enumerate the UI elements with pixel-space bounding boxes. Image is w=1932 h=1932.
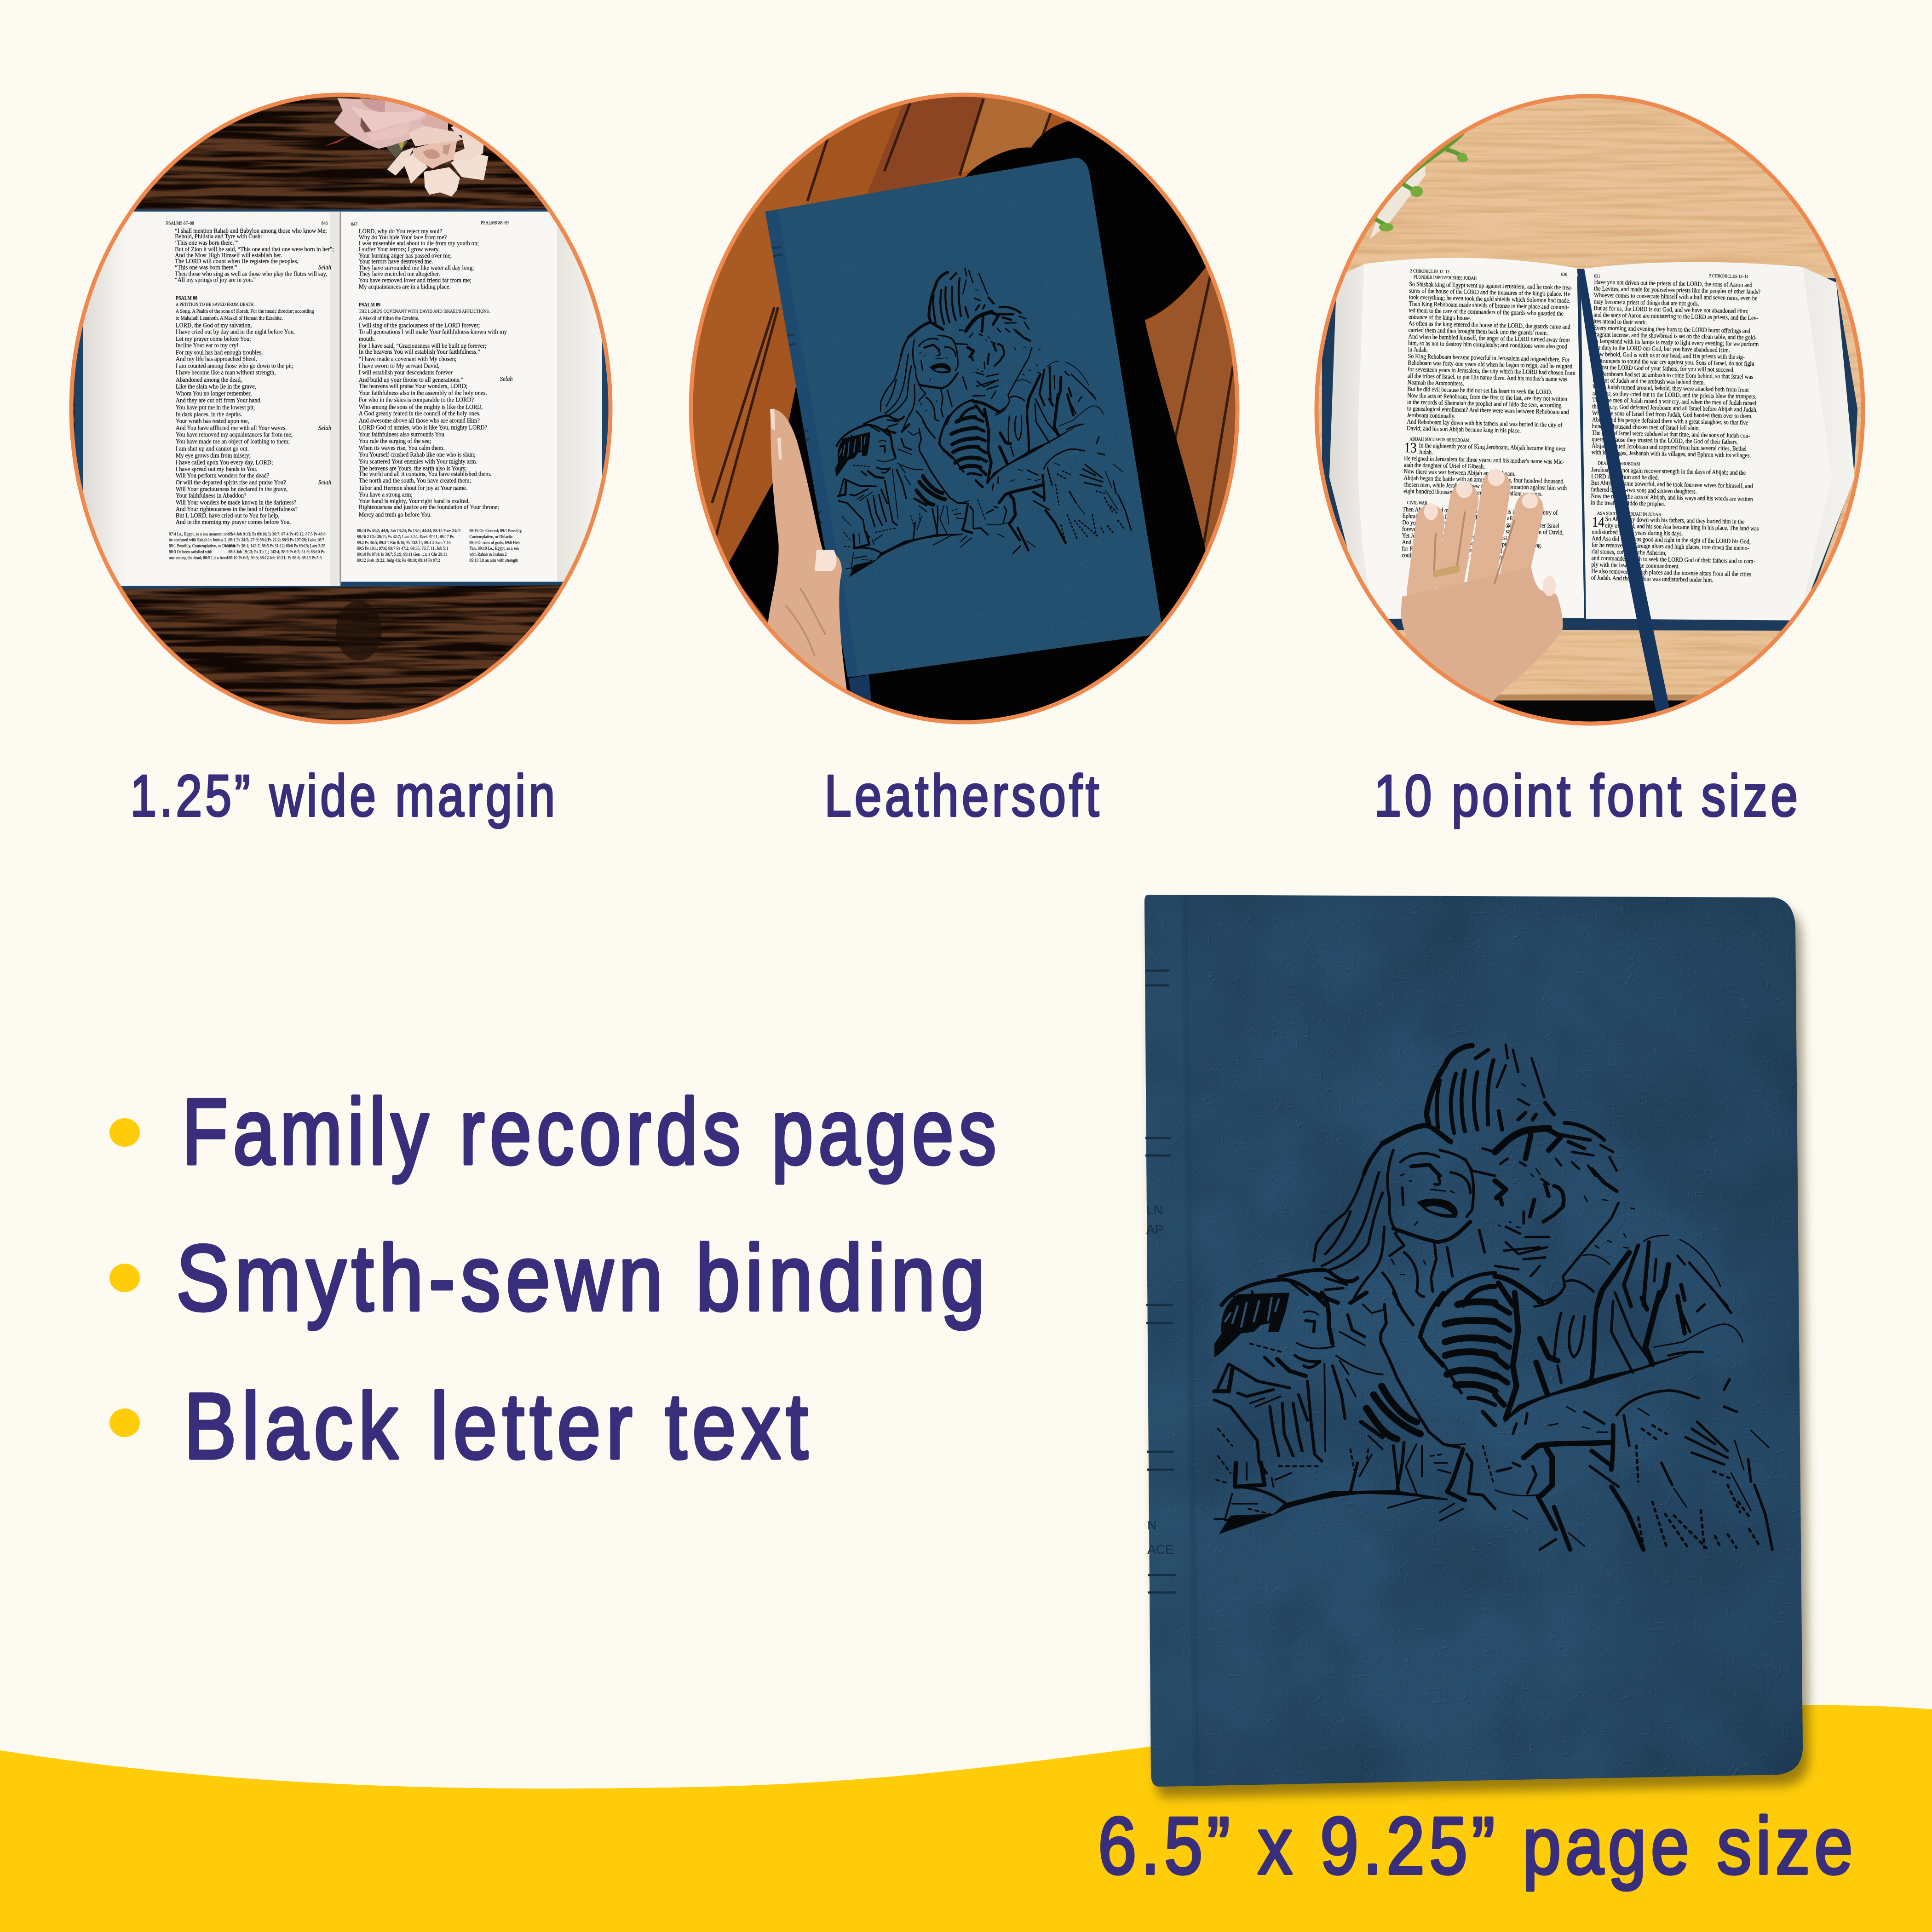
left page text: Then King Rehoboam made shields of bronze in their place and commit- xyxy=(1409,300,1569,310)
left page text: CIVIL WAR xyxy=(1407,500,1428,506)
left page text: My eye grows dim from misery; xyxy=(176,452,251,459)
right page text: Righteousness and justice are the foundation of Your throne; xyxy=(359,503,499,511)
right page text: You rule the surging of the sea; xyxy=(359,437,431,444)
right page text: ites attend to their work. xyxy=(1593,317,1647,326)
right page text: A God greatly feared in the council of the holy ones, xyxy=(359,409,481,417)
left page text: And You have afflicted me with all Your waves. xyxy=(176,424,287,431)
left page text: 846 xyxy=(322,221,328,226)
left page text: Let my prayer come before You; xyxy=(176,335,251,342)
footnotes: 88:4 Ps 28:1; 143:7; 88:5 Ps 31:12; 88:6 Ps 69:15; Lam 3:55 xyxy=(228,543,326,548)
orange ring xyxy=(71,95,610,722)
left page text: in the records of Shemaiah the prophet and of Iddo the seer, according xyxy=(1407,398,1562,409)
left page text: And worthless men gathered about him, who proved too strong xyxy=(1402,538,1541,549)
panel: open bible on light wood with hand and ribbon xyxy=(1311,69,1886,736)
right page text: But as for us, the LORD is our God, and we have not abandoned Him; xyxy=(1593,304,1748,315)
hand xyxy=(768,408,847,691)
left page text: PSALMS 87–88 xyxy=(166,221,194,226)
left page text: Or will the departed spirits rise and praise You? xyxy=(176,478,286,486)
right page text: Your hand is mighty, Your right hand is exalted. xyxy=(359,497,470,505)
left page text: Judah. xyxy=(1419,448,1433,456)
left page text: aiah the daughter of Uriel of Gibeah. xyxy=(1404,461,1485,470)
left page text: David; and his son Abijah became king in his place. xyxy=(1407,424,1521,434)
right page text: Then the men of Judah raised a war cry, and when the men of Judah raised xyxy=(1592,396,1756,407)
left page text: You have removed my acquaintances far from me; xyxy=(176,431,293,438)
left page text: Yet Jeroboam the son of Nebat, rebelled against his master. xyxy=(1402,531,1532,542)
left page text: He reigned in Jerusalem for three years; and his mother's name was Mic- xyxy=(1404,454,1564,465)
left page text: ABIJAH SUCCEEDS REHOBOAM xyxy=(1409,437,1470,443)
footnotes: one among the dead; 88:5 Lit a freed xyxy=(169,555,228,560)
right page text: Who among the sons of the mighty is like the LORD, xyxy=(359,403,483,410)
footnotes: 88:14 Ps 43:2; 44:9; Job 13:24; Ps 13:1; 44:24; 88:15 Prov 24:11 xyxy=(357,528,461,533)
right page text: PSALM 89 xyxy=(359,303,380,308)
feature: smyth-sewn: Smyth-sewn binding xyxy=(176,1226,990,1330)
spine lettering: LN xyxy=(1146,1203,1163,1217)
photo: table, book, hand, ribbon xyxy=(1311,69,1886,736)
left page text: Naamah the Ammonitess. xyxy=(1408,378,1464,387)
footnotes: Yah; 89:10 I.e., Egypt, as a sea xyxy=(469,546,519,551)
left page text: in Judah. xyxy=(1408,345,1428,353)
right page text: But Abijah became powerful, and he took fourteen wives for himself, and xyxy=(1591,479,1753,489)
large book cover xyxy=(1141,892,1809,1798)
right page text: For who in the skies is comparable to the LORD? xyxy=(359,396,474,403)
left page text: The LORD will count when He registers the peoples, xyxy=(175,257,299,264)
left page text: But he did evil because he did not set his heart to seek the LORD. xyxy=(1407,385,1552,396)
left page text: And Rehoboam lay down with his fathers and was buried in the city of xyxy=(1407,418,1563,429)
orange ring xyxy=(1317,96,1863,724)
right page text: LORD struck him and he died. xyxy=(1591,472,1659,481)
footnotes: 89:6 Or sons of gods; 89:8 Heb xyxy=(469,540,520,545)
right page text: For I have said, “Graciousness will be built up forever; xyxy=(359,342,486,349)
right page text: 847 xyxy=(351,222,357,227)
right page text: When Judah turned around, behold, they were attacked both from front xyxy=(1593,383,1749,393)
right page text: undisturbed for ten years during his days. xyxy=(1592,528,1683,537)
pages xyxy=(1358,258,1584,619)
left page text: Selah xyxy=(318,424,331,431)
floor planks xyxy=(866,95,983,197)
left page text: him, so as not to destroy him completely; and conditions were also good xyxy=(1408,339,1568,350)
left page text: entrance of the king's house. xyxy=(1409,313,1471,322)
rose flowers xyxy=(323,98,489,196)
right page text: In the heavens You will establish Your faithfulness.” xyxy=(359,348,480,355)
left page text: Your wrath has rested upon me, xyxy=(176,417,249,425)
left page text: Ephraim, and said, Listen to me, Jeroboam and all Israel: xyxy=(1402,512,1528,522)
right page text: quered because they trusted in the LORD, the God of their fathers. xyxy=(1592,435,1738,446)
leather cover xyxy=(1141,892,1809,1790)
right page text: To all generations I will make Your faithfulness known with my xyxy=(359,328,507,335)
right page text: our duty to the LORD our God, but you have abandoned Him. xyxy=(1593,344,1730,354)
right page text: I will establish your descendants forever xyxy=(359,369,453,376)
right page text: Why do You hide Your face from me? xyxy=(359,233,447,241)
left page text: all the tribes of Israel, to put His name there. And his mother's name was xyxy=(1408,372,1567,383)
footnotes: 88:1 Ps 24:5; 27:9; 88:2 Ps 22:2; 88:3 Ps 107:26; Luke 18:7 xyxy=(228,537,324,542)
footnotes: 87:4 I.e., Egypt, as a sea monster, not to xyxy=(169,531,233,536)
right page text: fragrant incense, and the showbread is set on the clean table, and the gold- xyxy=(1593,330,1757,341)
left page text: Rehoboam was forty-one years old when he began to reign, and he reigned xyxy=(1408,359,1573,370)
right page text: hundred thousand chosen men of Israel fell slain. xyxy=(1592,422,1700,431)
right page text: PSALMS 88–89 xyxy=(481,220,509,226)
right page text: And awesome above all those who are around Him? xyxy=(359,417,480,424)
right page text: Your faithfulness also surrounds You. xyxy=(359,431,446,437)
right page text: LORD, why do You reject my soul? xyxy=(359,227,442,235)
right page text: And Asa did what was good and right in the sight of the LORD his God, xyxy=(1592,535,1751,545)
left page text: Will You perform wonders for the dead? xyxy=(176,472,269,479)
spine lettering: ACE xyxy=(1147,1542,1174,1557)
right page text: Every morning and evening they burn to the LORD burnt offerings and xyxy=(1593,324,1751,334)
right page text: Jeroboam did not again recover strength in the days of Abijah; and the xyxy=(1591,466,1746,476)
right page text: DEATH OF JEROBOAM xyxy=(1598,461,1640,467)
left page text: Now there was war between Abijah and Jeroboam. xyxy=(1404,467,1516,477)
right page text: He also removed the high places and the incense altars from all the cities xyxy=(1591,567,1751,578)
right page text: When the sons of Israel fled from Judah, God handed them over to them. xyxy=(1592,409,1753,420)
left page text: I am shut up and cannot go out. xyxy=(176,445,249,452)
bullet 3 xyxy=(109,1409,140,1437)
left page text: “All my springs of joy are in you.” xyxy=(175,276,256,283)
left page text: Your faithfulness in Abaddon? xyxy=(176,492,247,499)
right page text: When its waves rise, You calm them. xyxy=(359,444,444,451)
left page text: ‘This one was born there.’” xyxy=(175,239,239,246)
left page text: took everything; he even took the gold shields which Solomon had made. xyxy=(1409,293,1570,304)
left page text: 2 CHRONICLES 12–13 xyxy=(1410,269,1449,275)
left page text: I have become like a man without strength, xyxy=(176,369,276,376)
right page text: They have encircled me altogether. xyxy=(359,270,440,277)
left page text: And my life has approached Sheol. xyxy=(176,355,257,362)
right page text: Have you not driven out the priests of the LORD, the sons of Aaron and xyxy=(1594,278,1753,288)
footnotes: 88:16 2 Chr 28:11; Ps 42:7; Lam 3:54; Ezek 37:11; 88:17 Ps xyxy=(357,534,454,539)
embossed family illustration xyxy=(1214,1045,1772,1550)
left page text: Will Your wonders be made known in the darkness? xyxy=(176,499,296,506)
left page text: For my soul has had enough troubles, xyxy=(176,349,263,356)
right page text: I have sworn to My servant David, xyxy=(359,362,439,369)
left page text: And Your righteousness in the land of forgetfulness? xyxy=(176,505,298,512)
right page text: rial stones, cut down the Asherim, xyxy=(1592,547,1667,557)
right page text: Mercy and truth go before You. xyxy=(359,511,431,518)
table edge xyxy=(1311,698,1886,736)
right page text: fathered twenty-two sons and sixteen daughters. xyxy=(1591,485,1697,495)
right page text: and the sons of Aaron are ministering to the LORD as priests, and the Lev- xyxy=(1593,310,1758,322)
left page text: Abijah began the battle with an army of warriors, four hundred thousand xyxy=(1403,474,1564,485)
footnotes: 89:12 Josh 19:22; Judg 4:6; Ps 48:10; 89:14 Ps 97:2 xyxy=(357,558,440,563)
right page text: LORD God of armies, who is like You, mighty LORD? xyxy=(359,424,487,431)
right page text: in the treatise of Iddo the prophet. xyxy=(1591,499,1666,507)
left page text: Whom You no longer remember, xyxy=(176,390,252,397)
left page text: for Rehoboam, when he was young and timid and xyxy=(1402,545,1512,554)
footnotes: be confused with Rahab in Joshua 2 xyxy=(169,537,227,542)
footnotes: 89:13 Lit an arm with strength xyxy=(469,558,518,563)
book shadow xyxy=(1150,906,1809,1798)
ribbon end xyxy=(848,675,872,705)
left page text: carried them and then brought them back into the guards' room. xyxy=(1409,326,1548,336)
right page text: mouth. xyxy=(359,335,375,342)
right page text: My acquaintances are in a hiding place. xyxy=(359,283,451,290)
navy cover under the book xyxy=(1322,274,1857,631)
left page text: Selah xyxy=(318,264,331,271)
right page text: against the LORD God of your fathers, for you will not succeed. xyxy=(1593,363,1735,374)
footnotes: Contemplative, or Didactic xyxy=(469,534,513,539)
left page text: Abandoned among the dead, xyxy=(176,376,242,383)
left page text: Do you not know that the LORD God of Israel gave the rule over Israel xyxy=(1402,518,1559,529)
right page text: Your faithfulness also in the assembly of the holy ones. xyxy=(359,389,487,397)
left page text: “I shall mention Rahab and Babylon among those who know Me; xyxy=(175,227,327,234)
fore-edges xyxy=(1329,264,1384,620)
right page text: and commanded Judah to seek the LORD God of their fathers and to com- xyxy=(1591,554,1755,565)
spine lettering: AP xyxy=(1146,1222,1163,1236)
right page text: the Levites, and made for yourselves priests like the peoples of other lands? xyxy=(1594,285,1760,295)
left page text: And in the morning my prayer comes before You. xyxy=(176,518,291,525)
footnotes: 88:1 Possibly, Contemplative, or Didactic xyxy=(169,543,236,548)
right page text: 14 xyxy=(1592,514,1604,530)
left page text: And when he humbled himself, the anger of the LORD turned away from xyxy=(1408,333,1570,344)
left page text: to genealogical enrollment? And there were wars between Rehoboam and xyxy=(1407,404,1569,415)
right page text: You Yourself crushed Rahab like one who is slain; xyxy=(359,451,476,458)
right page text: A Maskil of Ethan the Ezrahite. xyxy=(359,316,419,322)
left page text: I am counted among those who go down to the pit; xyxy=(176,362,293,369)
left page text: 630 xyxy=(1561,272,1567,277)
right page text: “I have made a covenant with My chosen; xyxy=(359,355,456,362)
footnotes: 88:3 Or been satisfied with xyxy=(169,549,213,554)
left page text: And the Most High Himself will establish her. xyxy=(175,251,282,259)
feature list xyxy=(109,1080,1001,1478)
footnotes: 88:10 Ps 6:5; 30:9; 88:12 Job 10:21; Ps 88:6; 88:13 Ps 5:3 xyxy=(228,555,322,560)
left page text: A Song. A Psalm of the sons of Korah. For the music director; according xyxy=(176,309,314,314)
right page text: So Abijah lay down with his fathers, and they buried him in the xyxy=(1605,515,1745,525)
right page text: I will sing of the graciousness of the LORD forever; xyxy=(359,322,480,329)
left page text: PSALM 88 xyxy=(176,296,197,301)
left page text: could not hold his own against the kingdom of the LORD xyxy=(1402,551,1529,561)
embossed family art xyxy=(817,242,1131,586)
right page text: 2 CHRONICLES 13–14 xyxy=(1709,274,1748,280)
right page text: ASA SUCCEEDS ABIJAH IN JUDAH xyxy=(1597,512,1662,518)
right page text: Whoever comes to consecrate himself with a bull and seven rams, even he xyxy=(1594,291,1758,302)
footnotes: 88:8 Job 19:13; Ps 31:11; 142:4; 88:9 Ps 6:7; 31:9; 88:10 Ps xyxy=(228,549,325,554)
left page text: A PETITION TO BE SAVED FROM DEATH. xyxy=(176,302,254,307)
caption: wide margin: 1.25” wide margin xyxy=(130,763,558,829)
feature: family records: Family records pages xyxy=(182,1080,1001,1184)
left page text: I have spread out my hands to You. xyxy=(176,465,257,472)
feature: black letter: Black letter text xyxy=(184,1374,813,1478)
right page text: The sons of Israel were subdued at that time, and the sons of Judah con- xyxy=(1592,429,1750,439)
black trousers xyxy=(727,119,1211,736)
left page text: Then those who sing as well as those who play the flutes will say, xyxy=(175,270,327,277)
right page text: en lampstand with its lamps is ready to light every evening; for we perform xyxy=(1593,337,1759,348)
left page text: I have cried out by day and in the night before You. xyxy=(176,328,295,335)
left page text: And they are cut off from Your hand. xyxy=(176,397,262,403)
left page text: LORD, the God of my salvation, xyxy=(176,322,252,329)
footnotes: 89:2 Ps 36:5; 89:3 1 Kin 8:16; Ps 132:11; 89:4 2 Sam 7:16 xyxy=(357,540,451,545)
left page text: forever to David and his sons by a covenant of salt? Yet the son of David, xyxy=(1402,525,1564,536)
left page text: Incline Your ear to my cry! xyxy=(176,341,238,349)
yellow wave band xyxy=(0,1705,1932,1932)
left page text: In the eighteenth year of King Jeroboam, Abijah became king over xyxy=(1419,442,1566,452)
left page text: So Shishak king of Egypt went up against Jerusalem, and he took the trea- xyxy=(1409,280,1572,291)
left page text: But of Zion it will be said, “This one and that one were born in her”; xyxy=(175,245,334,253)
right page text: I suffer Your terrors; I grow weary. xyxy=(359,245,440,253)
caption: leathersoft: Leathersoft xyxy=(824,763,1102,829)
left page text: Selah xyxy=(318,478,331,486)
right page text: The heavens are Yours, the earth also is Yours; xyxy=(359,465,467,472)
left page text: eight hundred thousand chosen men who were valiant warriors. xyxy=(1403,487,1543,498)
hand on page xyxy=(1401,469,1563,704)
right page text: But Jeroboam had set an ambush to come from behind, so that Israel was xyxy=(1593,370,1754,380)
right page text: The heavens will praise Your wonders, LORD; xyxy=(359,382,467,390)
right page text: and rear; so they cried out to the LORD, and the priests blew the trumpets. xyxy=(1593,389,1756,400)
footnotes: 89:10 Ps 87:4; Is 30:7; 51:9; 89:11 Gen 1:1; 1 Chr 29:11 xyxy=(357,552,448,557)
right page text: nal trumpets to sound the war cry against you. Sons of Israel, do not fight xyxy=(1593,356,1754,367)
left page text: ted them to the care of the commanders of the guards who guarded the xyxy=(1409,306,1564,317)
footnotes: 88:16 Or silenced; 89:1 Possibly, xyxy=(469,528,523,533)
right page text: They have surrounded me like water all day long; xyxy=(359,264,474,271)
book cover xyxy=(765,157,1162,678)
right page text: the war cry, God defeated Jeroboam and all Israel before Abijah and Judah. xyxy=(1592,402,1758,413)
left page text: In dark places, in the depths. xyxy=(176,410,242,418)
right page text: Your burning anger has passed over me; xyxy=(359,252,452,259)
left page text: Now the acts of Rehoboam, from the first to the last, are they not written xyxy=(1407,391,1568,402)
left page text: You have made me an object of loathing to them; xyxy=(176,437,290,445)
right page text: The world and all it contains, You have established them. xyxy=(359,470,491,477)
right page text: in front of Judah and the ambush was behind them. xyxy=(1593,376,1705,386)
left page text: So King Rehoboam became powerful in Jerusalem and reigned there. For xyxy=(1408,352,1570,363)
right page text: The north and the south, You have created them; xyxy=(359,477,471,484)
footnotes: with Rahab in Joshua 2 xyxy=(469,552,507,557)
panel: leathersoft cover held by hand xyxy=(690,69,1265,736)
right page text: You have a strong arm; xyxy=(359,491,413,498)
right page text: Your terrors have destroyed me. xyxy=(359,258,433,265)
right page text: of Judah. And the kingdom was undisturbed under him. xyxy=(1591,574,1713,584)
left page text: Then Abijah stood on Mount Zemaraim, which is in the hill country of xyxy=(1403,506,1558,516)
right page text: Now behold, God is with us at our head, and His priests with the sig- xyxy=(1593,350,1745,361)
right page text: And build up your throne to all generations.” xyxy=(359,376,463,383)
right page text: for he removed the foreign altars and high places, tore down the memo- xyxy=(1592,541,1749,552)
left page text: chosen men, while Jeroboam drew up in battle formation against him with xyxy=(1403,481,1567,492)
right page text: Tabor and Hermon shout for joy at Your name. xyxy=(359,484,467,491)
right page text: ply with the law and the commandment. xyxy=(1591,561,1680,570)
left page text: Jeroboam continually. xyxy=(1407,411,1455,420)
rear cover sliver xyxy=(75,209,610,589)
left page text: But I, LORD, have cried out to You for help, xyxy=(176,512,280,519)
caption: font size: 10 point font size xyxy=(1374,763,1801,829)
footnotes: 89:5 Ps 19:1; 97:6; 89:7 Ps 47:2; 68:35; 76:7, 11; Job 5:1 xyxy=(357,546,448,551)
left page text: Like the slain who lie in the grave, xyxy=(176,383,256,390)
left page text: to Mahalath Leannoth. A Maskil of Heman the Ezrahite. xyxy=(176,315,283,321)
orange ring xyxy=(691,95,1237,722)
right page text: Now the rest of the acts of Abijah, and his ways and his words are written xyxy=(1591,492,1753,503)
right page text: You have removed lover and friend far from me; xyxy=(359,276,472,284)
bullet 1 xyxy=(109,1118,140,1147)
left page text: 13 xyxy=(1404,440,1417,456)
left page text: I have called upon You every day, LORD; xyxy=(176,459,273,466)
left page text: Behold, Philistia and Tyre with Cush: xyxy=(175,233,262,240)
left page text: for seventeen years in Jerusalem, the city which the LORD had chosen from xyxy=(1408,365,1576,376)
right page text: Selah xyxy=(500,375,513,382)
footnotes: 87:4 Job 9:13; Ps 89:10; Is 30:7; 87:4 Ps 45:12; 87:5 Ps 48:8 xyxy=(228,531,326,536)
photo: wood and open book xyxy=(74,97,608,720)
right page text: Abijah and his people defeated them with a great slaughter, so that five xyxy=(1592,415,1748,426)
spine bands xyxy=(1145,971,1176,1593)
left page text: As often as the king entered the house of the LORD, the guards came and xyxy=(1409,319,1570,330)
right page text: with its villages, Jeshanah with its villages, and Ephron with its villages. xyxy=(1592,448,1751,459)
right page text: 631 xyxy=(1594,274,1600,279)
panel: open bible on dark wood xyxy=(69,93,613,724)
bullet 2 xyxy=(109,1264,140,1292)
plant and block xyxy=(1359,133,1467,242)
right page text: may become a priest of things that are not gods. xyxy=(1594,298,1699,307)
left page text: PLUNDER IMPOVERISHES JUDAH xyxy=(1414,275,1477,282)
right page text: THE LORD'S COVENANT WITH DAVID AND ISRAEL'S AFFLICTIONS. xyxy=(359,309,490,314)
right page text: Abijah pursued Jeroboam and captured from him several cities, Bethel xyxy=(1592,442,1747,452)
left page text: Will Your graciousness be declared in the grave, xyxy=(176,485,288,493)
left page text: You have put me in the lowest pit, xyxy=(176,403,255,411)
right page text: city of David, and his son Asa became king in his place. The land was xyxy=(1605,522,1759,532)
photo: wood floor, dark legs, book xyxy=(690,69,1265,736)
right page text: I was miserable and about to die from my youth on; xyxy=(359,239,479,247)
right page text: You scattered Your enemies with Your mighty arm. xyxy=(359,458,477,465)
ribbon bookmark xyxy=(1577,269,1670,713)
left page text: “This one was born there.” xyxy=(175,264,237,271)
left page text: sures of the house of the LORD and the treasures of the king's palace. He xyxy=(1409,287,1570,298)
spine lettering: N xyxy=(1147,1518,1156,1532)
